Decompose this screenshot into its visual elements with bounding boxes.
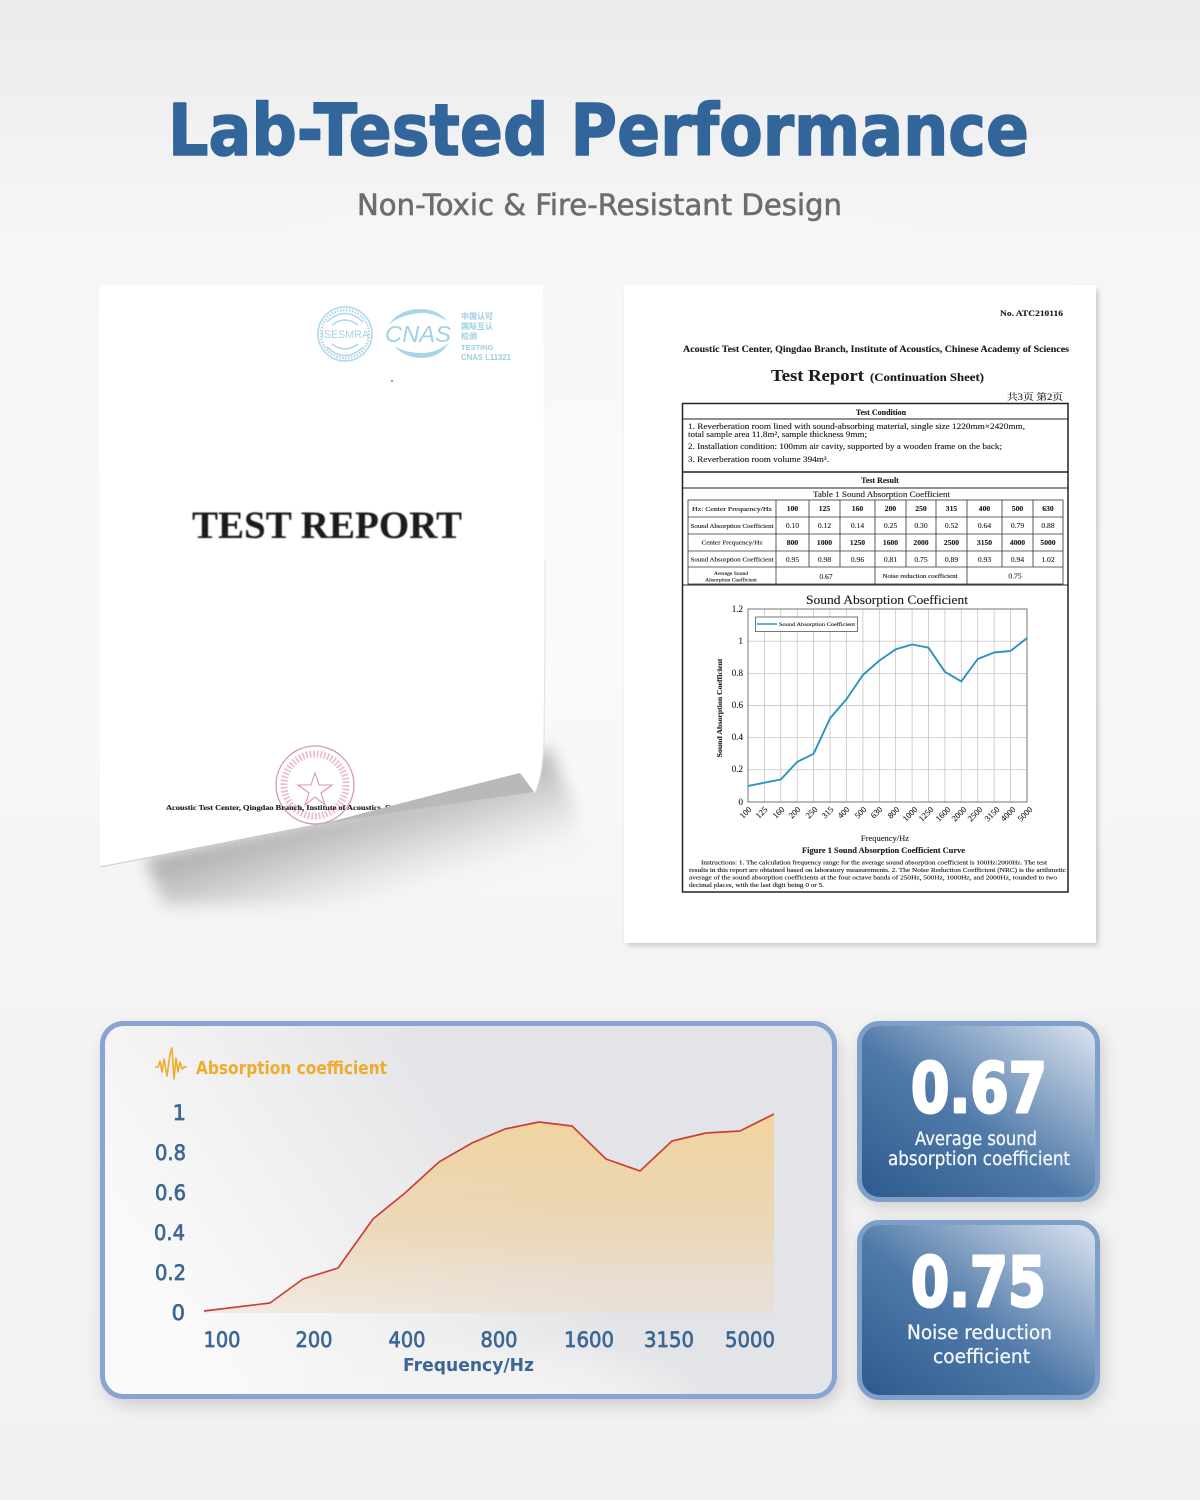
x-axis labels: 800 <box>480 1328 518 1352</box>
y-axis labels: 0.6 <box>155 1181 186 1205</box>
embedded line chart: 800 <box>885 804 901 820</box>
x-axis labels: 5000 <box>725 1328 775 1352</box>
document: test report cover <box>99 285 578 905</box>
coefficient table: 0.94 <box>1011 555 1024 564</box>
embedded line chart: Figure 1 Sound Absorption Coefficient Curve <box>802 846 965 855</box>
card: noise reduction coefficient: 0.75 <box>911 1243 1046 1323</box>
embedded line chart: 0.6 <box>732 700 744 710</box>
embedded line chart: 0 <box>738 797 744 807</box>
coefficient table: 0.89 <box>945 555 958 564</box>
card: average sound absorption coefficient: 0.67 <box>911 1049 1047 1129</box>
coefficient table: 100 <box>787 504 798 513</box>
report header text: Acoustic Test Center, Qingdao Branch, Institute of Acoustics, Chinese Academy of Sciences <box>683 344 1070 354</box>
stamp: accreditation text: CNAS L11321 <box>461 353 512 362</box>
coefficient table: 0.10 <box>786 521 799 530</box>
embedded line chart: 400 <box>835 804 851 820</box>
report header text: 共3页 第2页 <box>1007 391 1063 402</box>
embedded line chart: 200 <box>786 804 802 820</box>
embedded line chart: 1600 <box>933 804 952 823</box>
stamp: CNAS logo <box>385 309 452 358</box>
test condition text: Table 1 Sound Absorption Coefficient <box>813 489 951 499</box>
x-axis labels: 1600 <box>564 1328 614 1352</box>
coefficient table: 630 <box>1042 504 1054 513</box>
coefficient table: Absorption Coefficient <box>705 576 757 584</box>
coefficient table: 5000 <box>1040 538 1056 547</box>
stamp: CNAS logo: CNAS <box>385 321 452 347</box>
chart legend title: Absorption coefficient <box>196 1058 387 1079</box>
coefficient table: 2000 <box>913 538 929 547</box>
embedded line chart: 630 <box>868 804 884 820</box>
coefficient table: 0.64 <box>978 521 991 530</box>
coefficient table: 0.95 <box>786 555 799 564</box>
coefficient table: Sound Absorption Coefficient <box>690 556 774 564</box>
stamp: blue round seal: ISESMRA <box>321 329 370 341</box>
embedded line chart: 4000 <box>998 804 1017 823</box>
stamp: accreditation text: 检测 <box>461 331 477 341</box>
embedded line chart: 5000 <box>1015 804 1034 823</box>
coefficient table: 1600 <box>883 538 898 547</box>
coefficient table: 200 <box>885 504 896 513</box>
report header text: (Continuation Sheet) <box>870 372 984 384</box>
coefficient table: 500 <box>1012 504 1023 513</box>
embedded line chart: 1.2 <box>732 604 743 614</box>
coefficient table: 0.67 <box>819 572 833 581</box>
x-axis labels: 400 <box>388 1328 426 1352</box>
embedded line chart: 1250 <box>916 804 935 823</box>
coefficient table: 4000 <box>1010 538 1025 547</box>
stamp: accreditation text: 中国认可 <box>461 311 493 321</box>
coefficient table: 160 <box>852 504 863 513</box>
test condition text: 1. Reverberation room lined with sound-absorbing material, single size 1220mm×2420mm, <box>688 422 1025 431</box>
card: average sound absorption coefficient <box>860 1024 1103 1207</box>
coefficient table: 0.93 <box>978 555 991 564</box>
subtitle: Non-Toxic & Fire-Resistant Design <box>357 188 842 222</box>
heading: TEST REPORT: TEST REPORT <box>192 504 462 547</box>
embedded line chart: 1000 <box>900 804 919 823</box>
x-axis title: Frequency/Hz <box>403 1355 534 1376</box>
embedded line chart: 0.4 <box>732 732 744 742</box>
coefficient table: 1250 <box>850 538 865 547</box>
card: average sound absorption coefficient: Average sound <box>915 1129 1037 1150</box>
stamp: accreditation text: TESTING <box>461 343 494 352</box>
test condition text: total sample area 11.8m², sample thickness 9mm; <box>688 430 867 439</box>
embedded line chart: Sound Absorption Coefficient <box>779 621 856 628</box>
document: continuation sheet <box>624 285 1098 945</box>
coefficient table: 800 <box>787 538 798 547</box>
coefficient table: Sound Absorption Coefficient <box>690 523 774 530</box>
embedded line chart <box>715 593 1034 855</box>
report instructions: decimal places, with the last digit being 0 or 5. <box>689 883 825 889</box>
coefficient table: Average Sound <box>714 571 748 577</box>
embedded line chart: 1 <box>738 636 743 646</box>
coefficient table <box>688 500 1063 584</box>
embedded line chart: 160 <box>770 804 786 820</box>
embedded line chart: 100 <box>737 804 753 820</box>
coefficient table: 0.12 <box>818 521 831 530</box>
card: noise reduction coefficient: coefficient <box>933 1345 1030 1368</box>
coefficient table: 400 <box>979 504 990 513</box>
coefficient table: 2500 <box>944 538 959 547</box>
y-axis labels: 0.4 <box>154 1221 185 1245</box>
embedded line chart: Sound Absorption Coefficient <box>715 658 724 757</box>
embedded line chart: 500 <box>852 804 868 820</box>
coefficient table: 315 <box>946 504 957 513</box>
panel: absorption chart <box>98 1021 846 1411</box>
test condition text <box>688 408 1025 499</box>
coefficient table: 0.25 <box>884 521 897 530</box>
embedded line chart: 315 <box>819 804 835 820</box>
x-axis labels: 3150 <box>644 1328 694 1352</box>
coefficient table: 0.98 <box>818 555 831 564</box>
coefficient table: 0.75 <box>1008 572 1022 580</box>
card: noise reduction coefficient <box>860 1222 1103 1406</box>
stamp: red seal <box>276 746 354 824</box>
report instructions: average of the sound absorption coefficients at the four octave bands of 250Hz, 500Hz, 1000Hz, and 2000Hz, rounded to two <box>689 874 1057 882</box>
x-axis labels <box>204 1328 775 1352</box>
x-axis labels: 100 <box>204 1328 240 1352</box>
test condition text: Test Result <box>861 476 899 485</box>
report instructions: results in this report are obtained based on laboratory measurements. 2. The Noise Reduction Coefficient (NRC) is the arithmetic <box>689 867 1066 874</box>
title: Lab-Tested Performance <box>168 89 1029 172</box>
footer text: Acoustic Test Center, Qingdao Branch, Institute of Acoustics, C <box>166 803 391 812</box>
area chart <box>204 1114 774 1313</box>
embedded line chart: 3150 <box>982 804 1001 823</box>
card: noise reduction coefficient: Noise reduction <box>907 1321 1052 1344</box>
coefficient table: 3150 <box>977 538 992 547</box>
coefficient table: 0.75 <box>914 555 928 564</box>
coefficient table: 0.30 <box>914 521 928 530</box>
coefficient table: 125 <box>819 504 830 513</box>
icon: sound wave <box>155 1048 187 1079</box>
report header text <box>683 308 1070 402</box>
y-axis labels: 1 <box>173 1101 186 1125</box>
embedded line chart: 2500 <box>965 804 984 823</box>
embedded line chart: 125 <box>753 804 769 820</box>
embedded line chart: 0.2 <box>732 764 743 774</box>
report header text: No. ATC210116 <box>1000 308 1063 318</box>
test condition text: 3. Reverberation room volume 394m³. <box>688 455 829 464</box>
embedded line chart: 2000 <box>949 804 968 823</box>
y-axis labels: 0.8 <box>155 1141 186 1165</box>
coefficient table: Noise reduction coefficient <box>882 573 958 580</box>
card: average sound absorption coefficient: absorption coefficient <box>888 1149 1070 1170</box>
coefficient table: 1.02 <box>1041 555 1055 564</box>
coefficient table: 0.14 <box>851 521 864 530</box>
embedded line chart: 250 <box>803 804 819 820</box>
embedded line chart: Sound Absorption Coefficient <box>806 593 969 607</box>
y-axis labels: 0 <box>172 1301 185 1325</box>
coefficient table: 0.52 <box>945 521 958 530</box>
y-axis labels <box>154 1101 186 1325</box>
coefficient table: 0.81 <box>884 555 897 564</box>
stamp: blue round seal <box>318 307 372 361</box>
test condition text: Test Condition <box>856 408 907 417</box>
coefficient table: Center Frequency/Hz <box>702 540 763 546</box>
coefficient table: 0.88 <box>1041 521 1055 530</box>
report instructions <box>689 860 1066 889</box>
coefficient table: 0.96 <box>851 555 864 564</box>
embedded line chart: Frequency/Hz <box>861 833 909 843</box>
table frame <box>682 404 1068 892</box>
x-axis labels: 200 <box>296 1328 332 1352</box>
test condition text: 2. Installation condition: 100mm air cavity, supported by a wooden frame on the back; <box>688 442 1002 451</box>
report instructions: Instructions: 1. The calculation frequency range for the average sound absorption coefficient is 100Hz:2000Hz. The test <box>701 860 1047 866</box>
coefficient table: Hz: Center Frequency/Hz <box>692 507 773 513</box>
y-axis labels: 0.2 <box>155 1261 186 1285</box>
stamp: accreditation text: 国际互认 <box>461 321 493 331</box>
embedded line chart: 0.8 <box>732 668 744 678</box>
coefficient table: 1000 <box>817 538 832 547</box>
coefficient table: 0.79 <box>1011 521 1024 530</box>
report header text: Test Report <box>771 366 864 385</box>
stamp: accreditation text <box>461 311 512 362</box>
coefficient table: 250 <box>915 504 927 513</box>
